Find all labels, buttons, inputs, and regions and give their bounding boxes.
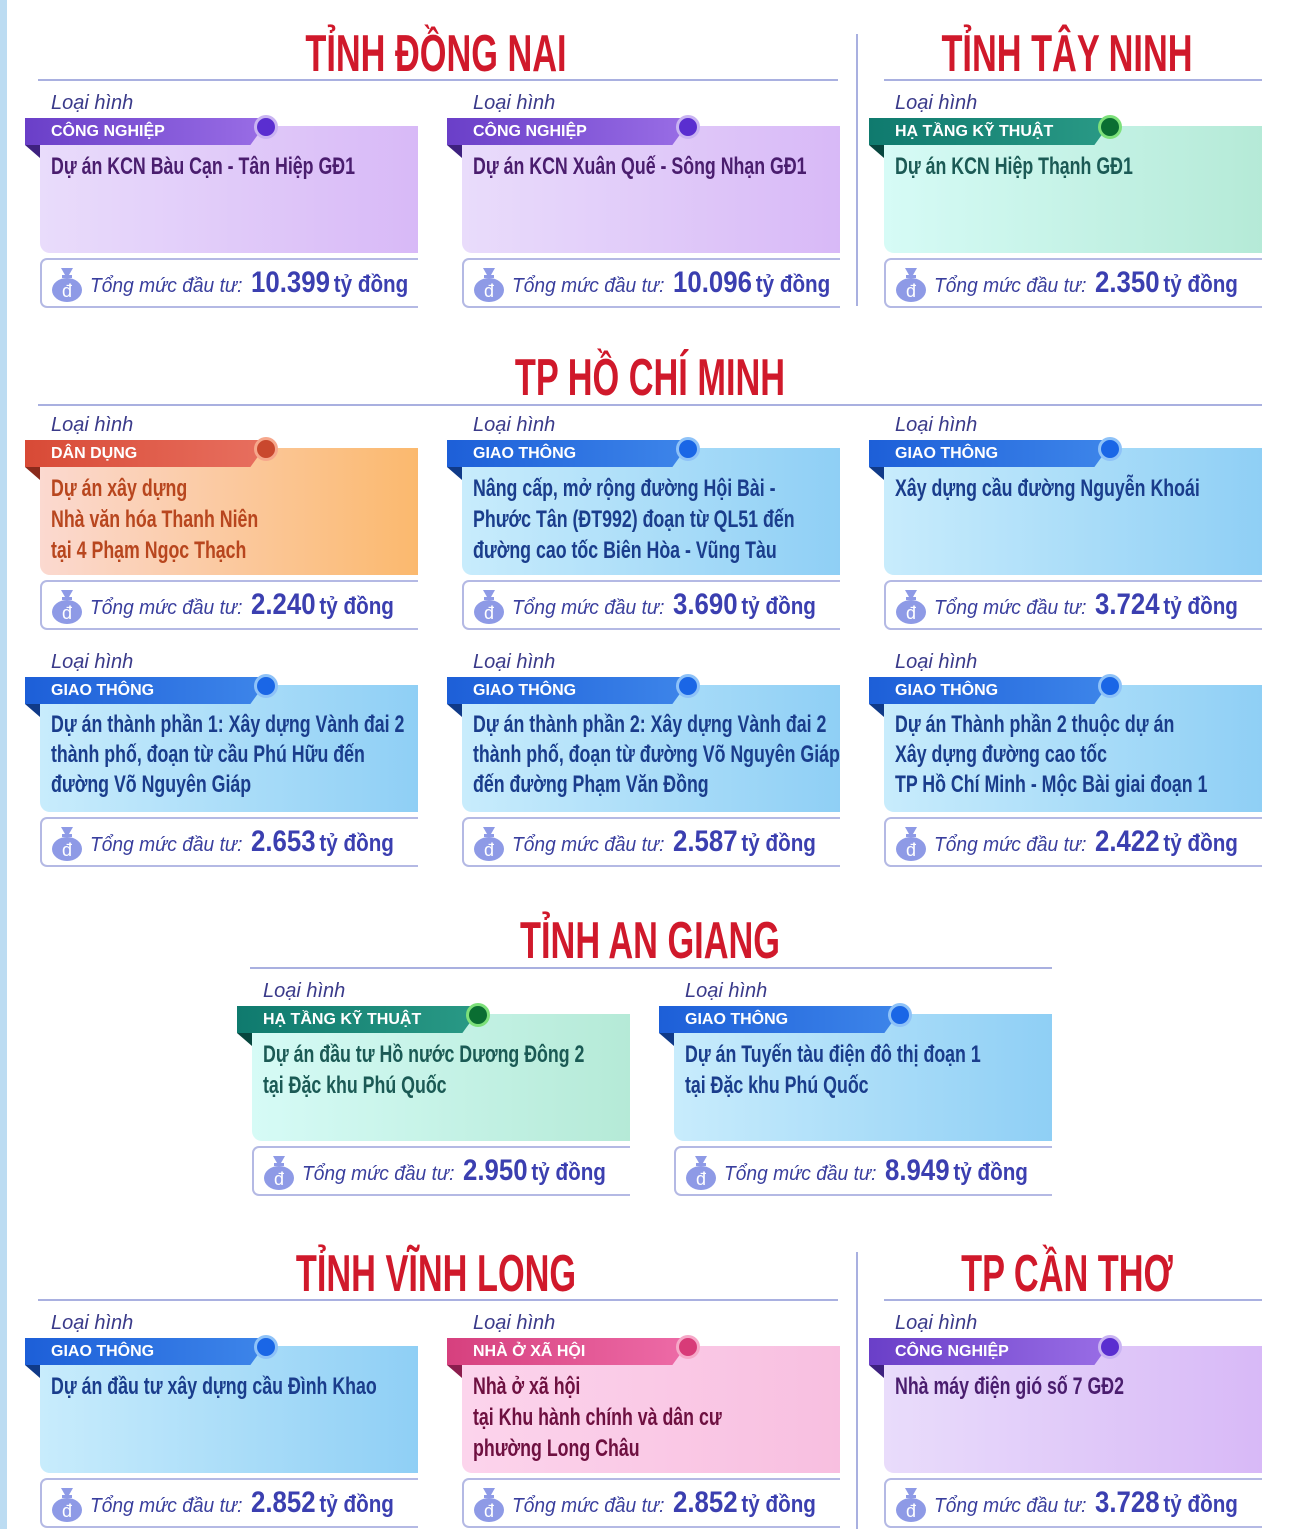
- card: Cau Dinh Khao: Tổng mức đầu tư:: [90, 1495, 242, 1517]
- card: Cau Dinh Khao: [25, 1312, 418, 1528]
- card: KCN Hiep Thanh: Tổng mức đầu tư:: [934, 275, 1086, 297]
- card: Vanh dai 2 thanh phan 2: đến đường Phạm Văn Đồng: [473, 771, 709, 798]
- card: Vanh dai 2 thanh phan 1: Tổng mức đầu tư:: [90, 834, 242, 856]
- card: KCN Hiep Thanh: Dự án KCN Hiệp Thạnh GĐ1: [895, 153, 1133, 180]
- card: Cao toc TP HCM - Moc Bai: Tổng mức đầu tư:: [934, 834, 1086, 856]
- card: Vanh dai 2 thanh phan 2: Dự án thành phần 2: Xây dựng Vành đai 2: [473, 711, 826, 738]
- card: Cau Nguyen Khoai: [869, 414, 1262, 630]
- card: KCN Xuan Que: Dự án KCN Xuân Quế - Sông Nhạn GĐ1: [473, 153, 807, 180]
- card: Nha may dien gio so 7: Tổng mức đầu tư:: [934, 1495, 1086, 1517]
- card: Cau Nguyen Khoai: Loại hình: [895, 414, 977, 436]
- card: Nha van hoa Thanh Nien: 2.240 tỷ đồng: [251, 588, 394, 621]
- card: Nha van hoa Thanh Nien: DÂN DỤNG: [51, 445, 137, 462]
- card: KCN Bau Can: Loại hình: [51, 92, 133, 114]
- card: Hoi Bai - Phuoc Tan: [447, 414, 840, 630]
- card: Tau dien do thi: tại Đặc khu Phú Quốc: [685, 1072, 869, 1099]
- card: Ho nuoc Duong Dong 2: Loại hình: [263, 980, 345, 1002]
- card: Ho nuoc Duong Dong 2: Dự án đầu tư Hồ nước Dương Đông 2: [263, 1041, 584, 1068]
- card: Cao toc TP HCM - Moc Bai: 2.422 tỷ đồng: [1095, 825, 1238, 858]
- card: Ho nuoc Duong Dong 2: HẠ TẦNG KỸ THUẬT: [263, 1011, 421, 1028]
- card: Vanh dai 2 thanh phan 1: [25, 651, 418, 867]
- card: Vanh dai 2 thanh phan 2: thành phố, đoạn từ đường Võ Nguyên Giáp: [473, 741, 840, 768]
- card: Nha van hoa Thanh Nien: Loại hình: [51, 414, 133, 436]
- title: Tinh Vinh Long: TỈNH VĨNH LONG: [296, 1245, 576, 1303]
- card: Nha o xa hoi Long Chau: tại Khu hành chính và dân cư: [473, 1404, 722, 1431]
- card: KCN Bau Can: Dự án KCN Bàu Cạn - Tân Hiệp GĐ1: [51, 153, 355, 180]
- card: KCN Hiep Thanh: 2.350 tỷ đồng: [1095, 266, 1238, 299]
- card: KCN Bau Can: CÔNG NGHIỆP: [51, 123, 165, 140]
- card: Hoi Bai - Phuoc Tan: Tổng mức đầu tư:: [512, 597, 664, 619]
- card: Cao toc TP HCM - Moc Bai: Dự án Thành phần 2 thuộc dự án: [895, 711, 1174, 738]
- card: Vanh dai 2 thanh phan 1: Loại hình: [51, 651, 133, 673]
- card: Tau dien do thi: [659, 980, 1052, 1196]
- card: KCN Hiep Thanh: đ: [906, 281, 916, 301]
- card: Nha van hoa Thanh Nien: [25, 414, 418, 630]
- card: KCN Bau Can: 10.399 tỷ đồng: [251, 266, 408, 299]
- card: Nha o xa hoi Long Chau: NHÀ Ở XÃ HỘI: [473, 1343, 585, 1360]
- card: Vanh dai 2 thanh phan 2: GIAO THÔNG: [473, 682, 576, 699]
- card: Vanh dai 2 thanh phan 1: 2.653 tỷ đồng: [251, 825, 394, 858]
- card: Hoi Bai - Phuoc Tan: Nâng cấp, mở rộng đường Hội Bài -: [473, 475, 776, 502]
- card: Nha may dien gio so 7: Nhà máy điện gió số 7 GĐ2: [895, 1373, 1124, 1400]
- card: Cau Nguyen Khoai: Xây dựng cầu đường Nguyễn Khoái: [895, 475, 1200, 502]
- card: Ho nuoc Duong Dong 2: 2.950 tỷ đồng: [463, 1154, 606, 1187]
- card: Cau Dinh Khao: đ: [62, 1501, 72, 1521]
- card: Cau Dinh Khao: Loại hình: [51, 1312, 133, 1334]
- card: KCN Xuan Que: CÔNG NGHIỆP: [473, 123, 587, 140]
- card: Nha o xa hoi Long Chau: phường Long Châu: [473, 1435, 640, 1462]
- card: Nha may dien gio so 7: CÔNG NGHIỆP: [895, 1343, 1009, 1360]
- card: KCN Bau Can: [25, 92, 418, 308]
- card: Nha o xa hoi Long Chau: 2.852 tỷ đồng: [673, 1486, 816, 1519]
- card: Hoi Bai - Phuoc Tan: đường cao tốc Biên Hòa - Vũng Tàu: [473, 537, 777, 564]
- card: KCN Xuan Que: đ: [484, 281, 494, 301]
- card: KCN Hiep Thanh: HẠ TẦNG KỸ THUẬT: [895, 123, 1053, 140]
- card: Vanh dai 2 thanh phan 1: thành phố, đoạn từ cầu Phú Hữu đến: [51, 741, 365, 768]
- card: Vanh dai 2 thanh phan 1: GIAO THÔNG: [51, 682, 154, 699]
- card: Cau Nguyen Khoai: 3.724 tỷ đồng: [1095, 588, 1238, 621]
- card: Vanh dai 2 thanh phan 1: đường Võ Nguyên Giáp: [51, 771, 251, 798]
- card: Cao toc TP HCM - Moc Bai: Xây dựng đường cao tốc: [895, 741, 1107, 768]
- title: TP Ho Chi Minh: TP HỒ CHÍ MINH: [515, 349, 785, 407]
- title: Tinh An Giang: TỈNH AN GIANG: [520, 912, 780, 970]
- card: Cau Dinh Khao: Dự án đầu tư xây dựng cầu Đình Khao: [51, 1373, 377, 1400]
- card: Cau Nguyen Khoai: GIAO THÔNG: [895, 445, 998, 462]
- card: Cau Dinh Khao: GIAO THÔNG: [51, 1343, 154, 1360]
- card: Hoi Bai - Phuoc Tan: Loại hình: [473, 414, 555, 436]
- card: Ho nuoc Duong Dong 2: đ: [274, 1169, 284, 1189]
- title: Tinh Dong Nai: TỈNH ĐỒNG NAI: [305, 25, 567, 83]
- card: Nha may dien gio so 7: Loại hình: [895, 1312, 977, 1334]
- card: KCN Hiep Thanh: [869, 92, 1262, 308]
- card: KCN Bau Can: Tổng mức đầu tư:: [90, 275, 242, 297]
- card: Nha may dien gio so 7: đ: [906, 1501, 916, 1521]
- card: Vanh dai 2 thanh phan 1: đ: [62, 840, 72, 860]
- card: Tau dien do thi: 8.949 tỷ đồng: [885, 1154, 1028, 1187]
- card: Nha o xa hoi Long Chau: Tổng mức đầu tư:: [512, 1495, 664, 1517]
- card: Nha o xa hoi Long Chau: Loại hình: [473, 1312, 555, 1334]
- card: KCN Xuan Que: Loại hình: [473, 92, 555, 114]
- card: Cau Nguyen Khoai: đ: [906, 603, 916, 623]
- card: Vanh dai 2 thanh phan 2: Tổng mức đầu tư:: [512, 834, 664, 856]
- card: Vanh dai 2 thanh phan 2: [447, 651, 840, 867]
- card: Vanh dai 2 thanh phan 2: 2.587 tỷ đồng: [673, 825, 816, 858]
- card: Ho nuoc Duong Dong 2: [237, 980, 630, 1196]
- card: Ho nuoc Duong Dong 2: Tổng mức đầu tư:: [302, 1163, 454, 1185]
- card: Tau dien do thi: đ: [696, 1169, 706, 1189]
- card: Cao toc TP HCM - Moc Bai: [869, 651, 1262, 867]
- card: Hoi Bai - Phuoc Tan: đ: [484, 603, 494, 623]
- card: Cau Dinh Khao: 2.852 tỷ đồng: [251, 1486, 394, 1519]
- card: Nha van hoa Thanh Nien: Tổng mức đầu tư:: [90, 597, 242, 619]
- title: Tinh Tay Ninh: TỈNH TÂY NINH: [941, 25, 1193, 83]
- card: Nha o xa hoi Long Chau: đ: [484, 1501, 494, 1521]
- card: Nha van hoa Thanh Nien: tại 4 Phạm Ngọc Thạch: [51, 537, 246, 564]
- card: Hoi Bai - Phuoc Tan: 3.690 tỷ đồng: [673, 588, 816, 621]
- card: KCN Bau Can: đ: [62, 281, 72, 301]
- card: Ho nuoc Duong Dong 2: tại Đặc khu Phú Quốc: [263, 1072, 447, 1099]
- card: KCN Xuan Que: [447, 92, 840, 308]
- card: Nha o xa hoi Long Chau: Nhà ở xã hội: [473, 1373, 580, 1400]
- card: Tau dien do thi: Loại hình: [685, 980, 767, 1002]
- card: KCN Xuan Que: Tổng mức đầu tư:: [512, 275, 664, 297]
- card: Cau Nguyen Khoai: Tổng mức đầu tư:: [934, 597, 1086, 619]
- card: Vanh dai 2 thanh phan 2: đ: [484, 840, 494, 860]
- title: TP Can Tho: TP CẦN THƠ: [961, 1245, 1173, 1303]
- card: Cao toc TP HCM - Moc Bai: đ: [906, 840, 916, 860]
- card: KCN Xuan Que: 10.096 tỷ đồng: [673, 266, 830, 299]
- card: Cao toc TP HCM - Moc Bai: GIAO THÔNG: [895, 682, 998, 699]
- card: Vanh dai 2 thanh phan 1: Dự án thành phần 1: Xây dựng Vành đai 2: [51, 711, 404, 738]
- card: Cao toc TP HCM - Moc Bai: Loại hình: [895, 651, 977, 673]
- card: Nha van hoa Thanh Nien: Dự án xây dựng: [51, 475, 187, 502]
- card: Tau dien do thi: GIAO THÔNG: [685, 1011, 788, 1028]
- card: Cao toc TP HCM - Moc Bai: TP Hồ Chí Minh - Mộc Bài giai đoạn 1: [895, 771, 1207, 798]
- card: Nha o xa hoi Long Chau: [447, 1312, 840, 1528]
- card: Hoi Bai - Phuoc Tan: GIAO THÔNG: [473, 445, 576, 462]
- card: KCN Hiep Thanh: Loại hình: [895, 92, 977, 114]
- card: Hoi Bai - Phuoc Tan: Phước Tân (ĐT992) đoạn từ QL51 đến: [473, 506, 795, 533]
- card: Vanh dai 2 thanh phan 2: Loại hình: [473, 651, 555, 673]
- card: Nha may dien gio so 7: 3.728 tỷ đồng: [1095, 1486, 1238, 1519]
- card: Tau dien do thi: Tổng mức đầu tư:: [724, 1163, 876, 1185]
- card: Nha may dien gio so 7: [869, 1312, 1262, 1528]
- card: Tau dien do thi: Dự án Tuyến tàu điện đô thị đoạn 1: [685, 1041, 981, 1068]
- card: Nha van hoa Thanh Nien: Nhà văn hóa Thanh Niên: [51, 506, 258, 533]
- card: Nha van hoa Thanh Nien: đ: [62, 603, 72, 623]
